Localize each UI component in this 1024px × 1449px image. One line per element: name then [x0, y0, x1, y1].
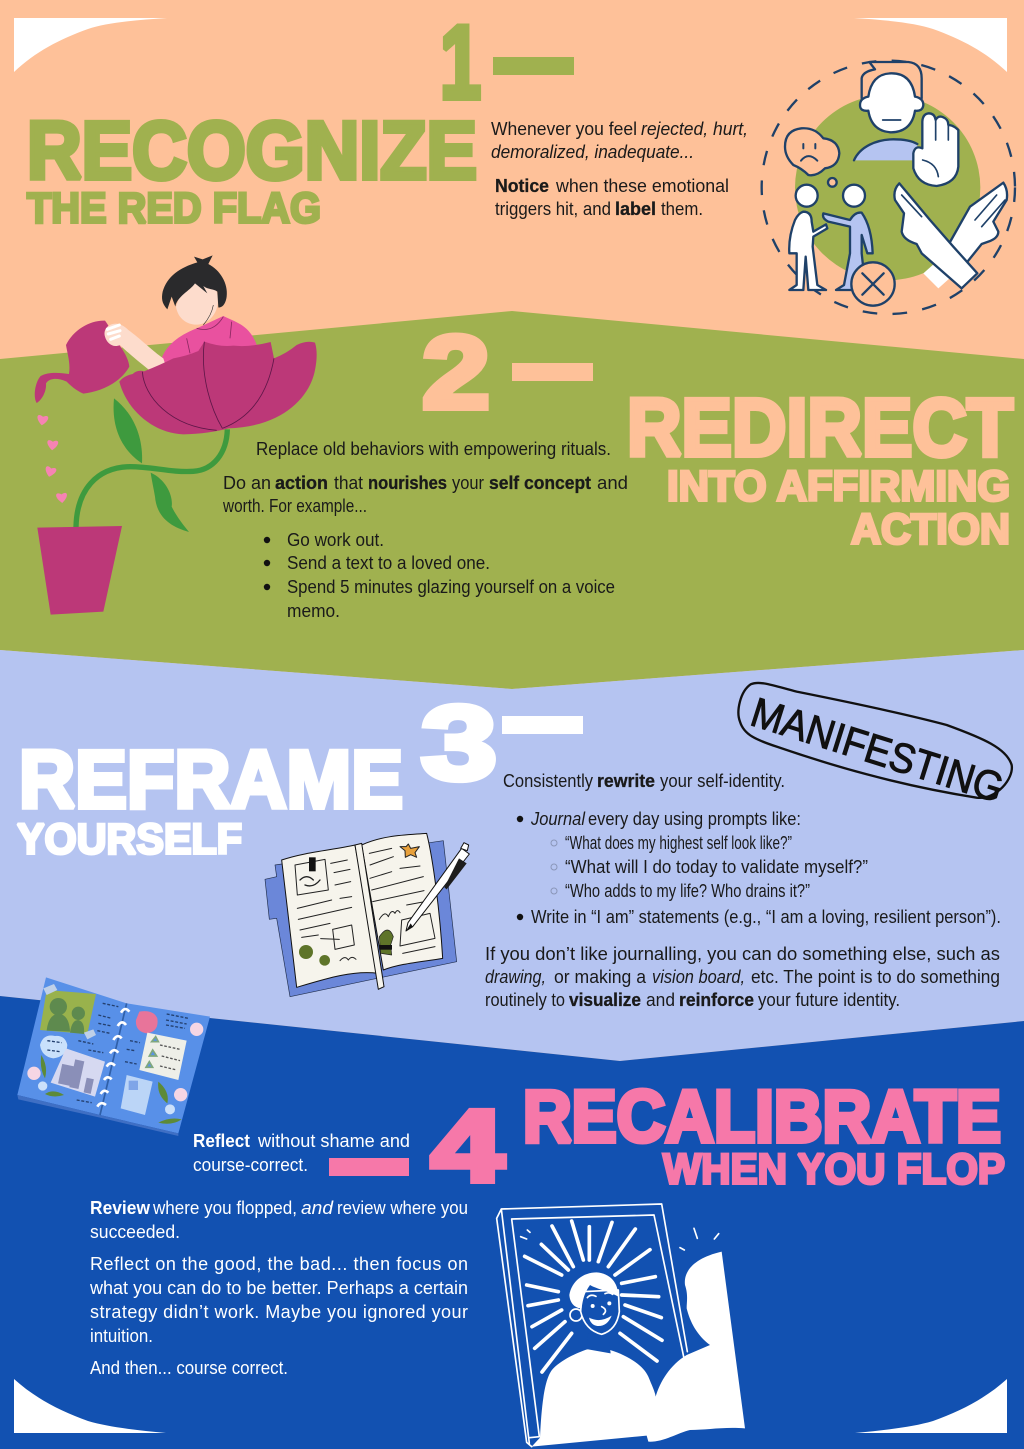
text block: step 4 body: review where you: [337, 1198, 468, 1218]
panel: lavender section: [0, 650, 1024, 1061]
illustration: person watering flower: [35, 255, 317, 615]
text block: step 3: “What does my highest self look like?”: [565, 833, 792, 853]
heading: reframe yourself: REFRAME: [19, 734, 403, 826]
text block: step 4 body: [89, 1198, 468, 1378]
icon: rejection illustration: [762, 61, 1015, 314]
text block: step 2: Do an: [223, 473, 271, 493]
text block: step 3: rewrite: [597, 771, 655, 791]
text block: step 4 intro: Reflect: [193, 1131, 250, 1151]
text block: step 1: when these emotional: [555, 176, 729, 196]
text block: step 3: reinforce: [679, 990, 754, 1010]
text block: step 2: self concept: [489, 473, 591, 493]
heading: reframe yourself: [17, 734, 403, 864]
text block: step 4 body: where you flopped,: [152, 1198, 297, 1218]
stamp: manifesting: MANIFESTING: [746, 688, 1009, 812]
text block: step 4 body: Review: [90, 1198, 151, 1218]
text block: step 2: Send a text to a loved one.: [287, 553, 490, 573]
number 3: 3: [421, 685, 497, 802]
text block: step 1: [491, 119, 748, 219]
text block: step 4 body: And then... course correct.: [90, 1358, 288, 1378]
decorative white corner bottom right: [855, 1379, 1007, 1433]
text block: step 3: Journal: [530, 809, 586, 829]
text block: step 3: every day using prompts like:: [588, 809, 801, 829]
icon: stem and leaves: [76, 429, 227, 527]
decorative white corner top right: [854, 18, 1007, 72]
text block: step 2: Replace old behaviors with empowering rituals.: [256, 439, 611, 459]
text block: step 2: Spend 5 minutes glazing yourself on a voice: [287, 577, 615, 597]
heading: recognize the red flag: RECOGNIZE: [27, 106, 477, 196]
icon: hair: [162, 255, 227, 309]
text block: step 4 body: intuition.: [90, 1326, 153, 1346]
text block: step 3: drawing,: [485, 967, 546, 987]
number 4: 4: [431, 1089, 504, 1203]
dash 4: [329, 1158, 409, 1176]
text block: step 3: your self-identity.: [660, 771, 785, 791]
icon: head: [176, 282, 218, 325]
text block: step 4 body: and: [301, 1198, 334, 1218]
heading: recognize the red flag: [27, 106, 477, 232]
heading: recalibrate when you flop: WHEN YOU FLOP: [663, 1146, 1005, 1194]
text block: step 4 body: what you can do to be better. Perhaps a certain: [89, 1278, 468, 1298]
text block: step 3: “What will I do today to validate myself?”: [565, 857, 868, 877]
text block: step 4 intro: [193, 1131, 410, 1175]
text block: step 4 intro: without shame and: [257, 1131, 410, 1151]
text block: step 1: label: [615, 199, 656, 219]
text block: step 2: your: [452, 473, 484, 493]
panel: green section: [0, 311, 1024, 689]
text block: step 2: nourishes: [368, 473, 447, 493]
heading: redirect into affirming action: [627, 382, 1013, 554]
heading: redirect into affirming action: ACTION: [851, 506, 1010, 554]
text block: step 3: [485, 771, 1001, 1010]
text block: step 3: etc. The point is to do something: [751, 967, 1000, 987]
decorative white corner bottom left: [14, 1379, 166, 1433]
text block: step 4 body: Reflect on the good, the bad... then focus on: [90, 1254, 468, 1274]
text block: step 3: Consistently: [503, 771, 593, 791]
text block: step 1: demoralized, inadequate...: [491, 142, 694, 162]
text block: step 3: If you don’t like journalling, you can do something else, such as: [485, 944, 1000, 964]
panel: blue section: [0, 996, 1024, 1449]
icon: arm and hand: [104, 324, 167, 369]
text block: step 2: Go work out.: [287, 530, 384, 550]
dash 2: [512, 363, 593, 381]
text block: step 1: rejected, hurt,: [641, 119, 748, 139]
text block: step 4 body: strategy didn’t work. Maybe you ignored your: [90, 1302, 468, 1322]
text block: step 1: Whenever you feel: [491, 119, 637, 139]
text block: step 2: memo.: [287, 601, 340, 621]
text block: step 3: or making a: [554, 967, 647, 987]
text block: step 3: vision board,: [652, 967, 745, 987]
icon: flower: [119, 342, 317, 434]
text block: step 3: “Who adds to my life? Who drains it?”: [565, 881, 810, 901]
text block: step 4 body: succeeded.: [90, 1222, 180, 1242]
text block: step 2: [222, 439, 628, 621]
illustration: person looking in mirror: [497, 1204, 745, 1447]
text block: step 2: action: [275, 473, 328, 493]
heading: redirect into affirming action: INTO AFFIRMING: [667, 462, 1010, 510]
text block: step 1: Notice: [495, 176, 549, 196]
text block: step 3: routinely to: [485, 990, 565, 1010]
illustration: blue scrapbook album: [17, 977, 210, 1136]
icon: watering can: [35, 321, 129, 403]
decorative white corner top left: [14, 18, 167, 72]
text block: step 1: triggers hit, and: [495, 199, 611, 219]
dash 3: [502, 716, 583, 734]
illustration: open journal with pen: [265, 833, 469, 997]
text block: step 2: and: [597, 473, 628, 493]
heading: recalibrate when you flop: [523, 1076, 1005, 1194]
icon: shirt: [162, 316, 257, 365]
text block: step 3: visualize: [569, 990, 641, 1010]
icon: flower pot: [37, 526, 122, 615]
text block: step 2: worth. For example...: [222, 496, 367, 516]
text block: step 2: that: [334, 473, 363, 493]
number 1: 1: [440, 5, 481, 121]
dash 1: [493, 57, 574, 75]
number 2: 2: [422, 315, 490, 431]
text block: step 3: your future identity.: [758, 990, 900, 1010]
heading: reframe yourself: YOURSELF: [17, 816, 242, 864]
icon: hearts: [36, 415, 68, 503]
heading: recognize the red flag: THE RED FLAG: [27, 184, 321, 232]
text block: step 1: them.: [661, 199, 703, 219]
text block: step 3: and: [646, 990, 675, 1010]
text block: step 4 intro: course-correct.: [193, 1155, 308, 1175]
